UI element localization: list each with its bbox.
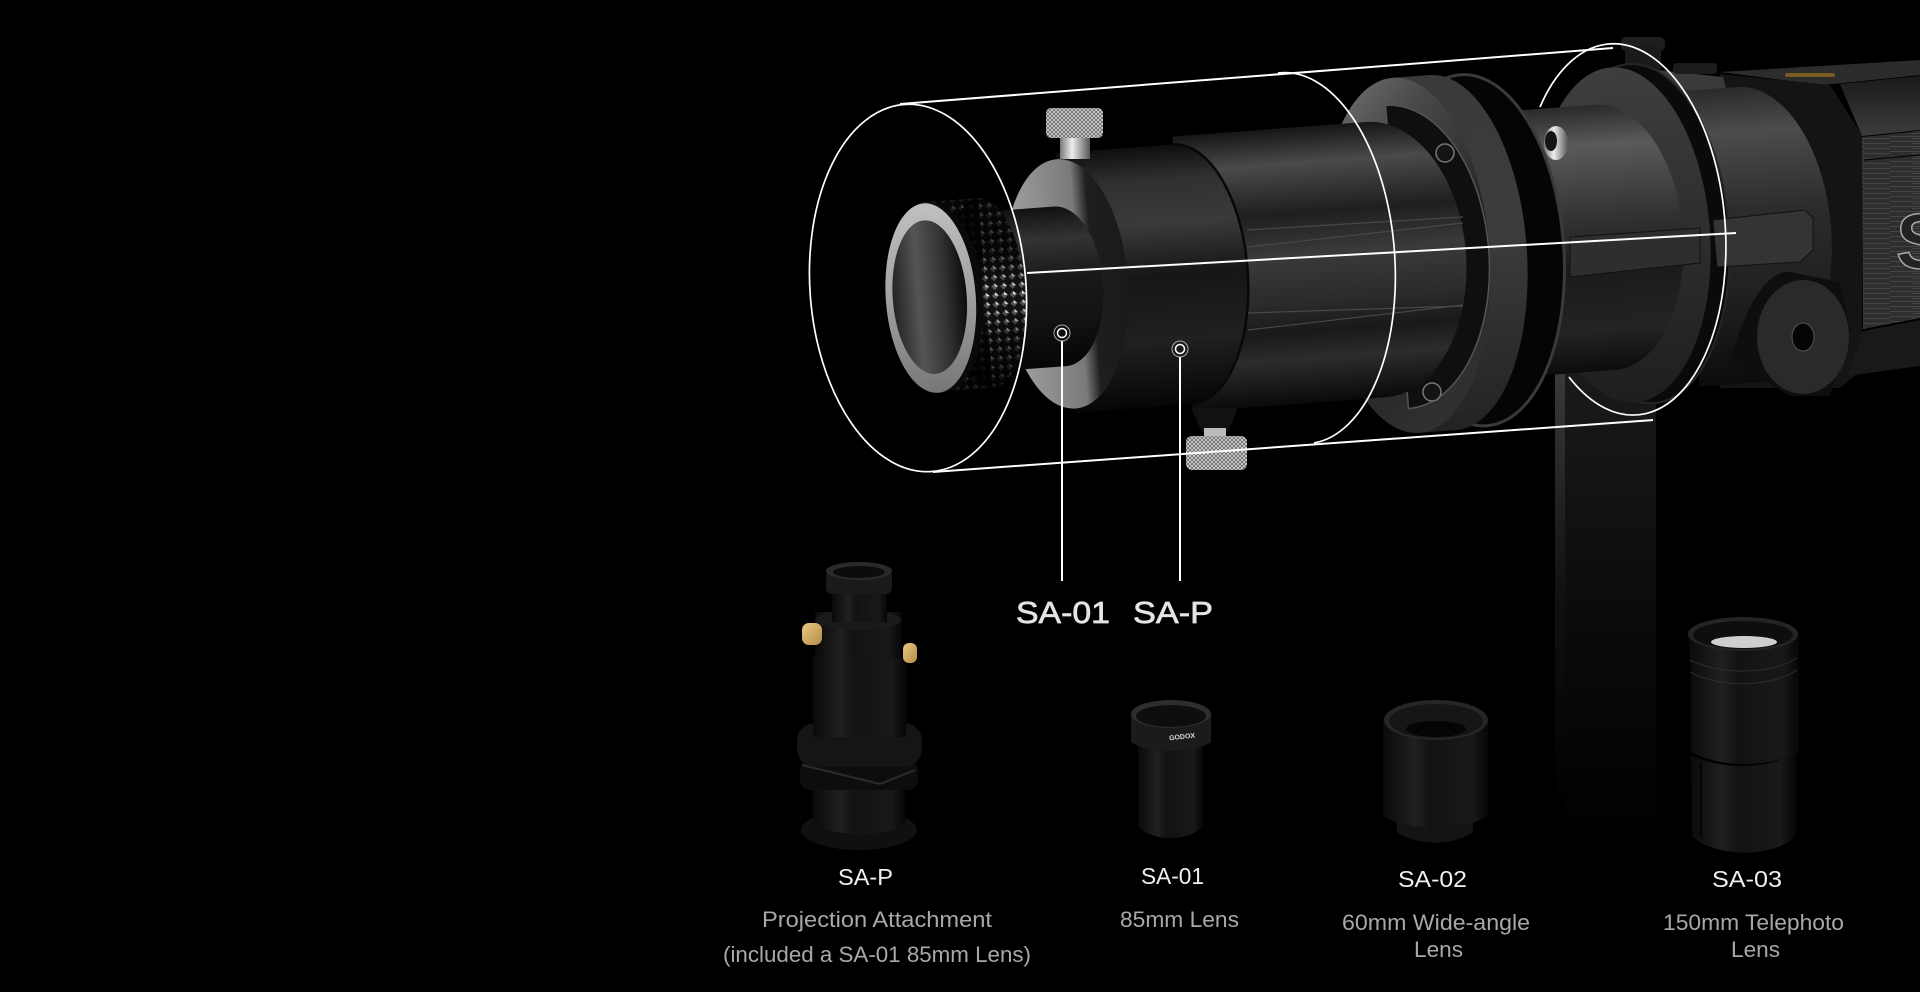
product: SA-01 lens [1131, 700, 1211, 838]
barrel seams [1247, 217, 1463, 330]
head barrel [1677, 81, 1842, 387]
front ring backing [886, 199, 990, 396]
lens brand mark: GODOX [1169, 733, 1196, 742]
outline: rear cylinder arc [1540, 44, 1726, 415]
flange recess [1386, 99, 1500, 409]
flange face [1309, 72, 1503, 439]
description: SA-P: (included a SA-01 85mm Lens) [723, 942, 1031, 967]
side lock knob [1730, 272, 1850, 396]
description: SA-02 [1342, 910, 1530, 962]
label: SA-02: SA-02 [1398, 866, 1467, 892]
flange screws [1423, 144, 1454, 401]
spring and thumbnut [1497, 126, 1568, 163]
callout label: SA-01: SA-01 [1016, 595, 1110, 630]
callout: SA-01 leader [1054, 325, 1070, 581]
secondary barrel [1056, 140, 1257, 413]
neck barrel [979, 203, 1109, 372]
product: SA-P projection attachment [797, 562, 922, 850]
description: SA-03: Lens [1731, 937, 1780, 962]
rear barrel [1498, 99, 1693, 377]
rear disk [1524, 61, 1722, 409]
bottom thumbscrew [1186, 408, 1247, 470]
description: SA-01: 85mm Lens [1120, 907, 1239, 932]
main barrel [1172, 115, 1476, 412]
label: SA-P: SA-P [838, 864, 893, 890]
product: SA-03 lens [1688, 617, 1799, 852]
top thumbscrew [1046, 108, 1103, 159]
callout label: SA-P: SA-P [1133, 595, 1213, 630]
stand bracket [1555, 370, 1656, 840]
label: SA-03: SA-03 [1712, 866, 1782, 892]
brass screws [802, 623, 917, 663]
description: SA-03: 150mm Telephoto [1663, 910, 1844, 935]
rear gap ring [1540, 58, 1741, 410]
silver annulus [995, 155, 1137, 413]
outline: front cylinder ellipse [797, 96, 1039, 480]
thin rear ring [1371, 68, 1577, 432]
flange rim [1346, 69, 1540, 436]
description: SA-03 [1663, 910, 1844, 962]
description: SA-02: Lens [1414, 937, 1463, 962]
product: SA-02 lens [1383, 700, 1488, 842]
light head body [1720, 60, 1920, 388]
outline: cylinder side lines [900, 48, 1736, 472]
description: SA-P [723, 907, 1031, 967]
top pin and clamp [1621, 37, 1727, 92]
side handle bar [1570, 210, 1813, 277]
outline: middle cylinder arc [1278, 73, 1395, 443]
front assembly [872, 66, 1577, 472]
description: SA-P: Projection Attachment [762, 907, 992, 932]
front lens ring [879, 200, 983, 396]
callout: SA-P leader [1172, 341, 1188, 581]
knurled ring [924, 195, 1033, 392]
label: SA-01: SA-01 [1141, 863, 1204, 889]
description: SA-02: 60mm Wide-angle [1342, 910, 1530, 935]
rear assembly [1496, 50, 1843, 413]
